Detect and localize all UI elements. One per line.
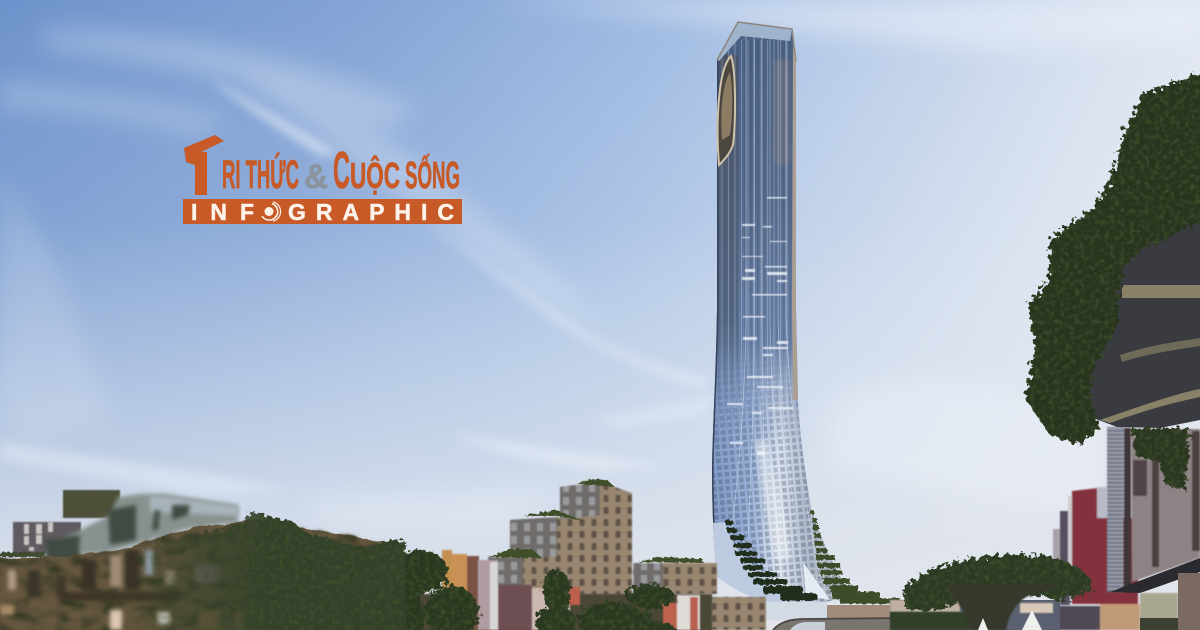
low block — [488, 557, 557, 587]
upper right bronze patches — [774, 60, 790, 165]
left planted terraces — [725, 520, 817, 601]
mid-rise apartment blocks — [488, 482, 766, 630]
right foreground building group — [890, 75, 1200, 630]
banner text: GRAPHIC — [288, 199, 454, 225]
banner text: INF — [191, 199, 254, 225]
pale slab edge — [1107, 238, 1130, 272]
logo banner — [183, 199, 462, 224]
roof gardens — [488, 479, 703, 563]
logo: Tri thức & Cuộc sống Infographic — [183, 135, 462, 225]
white podium wedge — [713, 522, 827, 604]
louvred tower — [1107, 427, 1124, 592]
street level behind tree — [890, 600, 1060, 630]
left waterfront building reflected in glass — [0, 490, 405, 630]
dark left edge — [712, 60, 717, 560]
icon: concentric disc in the banner — [262, 202, 281, 221]
logo wordmark — [222, 142, 460, 200]
dark canopy and shopfront — [1110, 558, 1200, 593]
glass canopy — [43, 494, 238, 560]
tower body — [712, 32, 844, 602]
banner text — [191, 199, 454, 225]
tower top cap — [717, 22, 792, 61]
stepped block — [510, 517, 632, 595]
podium arch — [773, 618, 900, 630]
logo wordmark: RI THỨC — [222, 151, 299, 197]
overgrown planting — [120, 512, 405, 630]
upper-left apartment — [13, 522, 81, 554]
tower right edge — [792, 45, 798, 400]
glass wedge on right — [803, 562, 830, 600]
roof planting strip — [0, 552, 45, 557]
facade window patches — [0, 550, 243, 630]
icon: stylised T roof — [184, 135, 224, 195]
climbing foliage — [1025, 75, 1200, 445]
logo: Tri thức & Cuộc sống Infographic: SỐNG — [405, 152, 460, 197]
mottled brown lower facade — [0, 520, 400, 630]
street trees and palms — [392, 550, 676, 630]
brown block below tower — [710, 597, 766, 630]
podium terrace band — [765, 602, 827, 620]
logo wordmark: C — [333, 142, 350, 200]
dark tower stripe — [1124, 428, 1131, 592]
logo wordmark: & — [304, 158, 328, 196]
colourful townhouses — [442, 550, 700, 630]
slab stripes — [1100, 285, 1200, 423]
tall block — [560, 482, 632, 593]
roof planter block — [63, 490, 120, 518]
overhanging slab — [1080, 216, 1200, 428]
crown oval opening — [718, 56, 735, 165]
hanging vines — [1133, 428, 1190, 490]
red brick building — [1053, 487, 1140, 630]
vertical mullions — [716, 40, 798, 422]
bright glass reflection — [755, 440, 792, 560]
pale brick building — [1131, 429, 1200, 582]
lit window flecks — [727, 197, 793, 455]
right planted terraces — [810, 510, 900, 604]
logo wordmark: UỘC — [350, 154, 400, 196]
curved facade mullions — [725, 36, 825, 600]
tower left dark strip — [715, 55, 738, 386]
right block — [633, 563, 717, 594]
umbrella tree — [903, 554, 1093, 630]
skyscraper tower — [700, 15, 903, 630]
street level ground behind houses — [400, 594, 712, 630]
facade fins — [714, 372, 844, 602]
